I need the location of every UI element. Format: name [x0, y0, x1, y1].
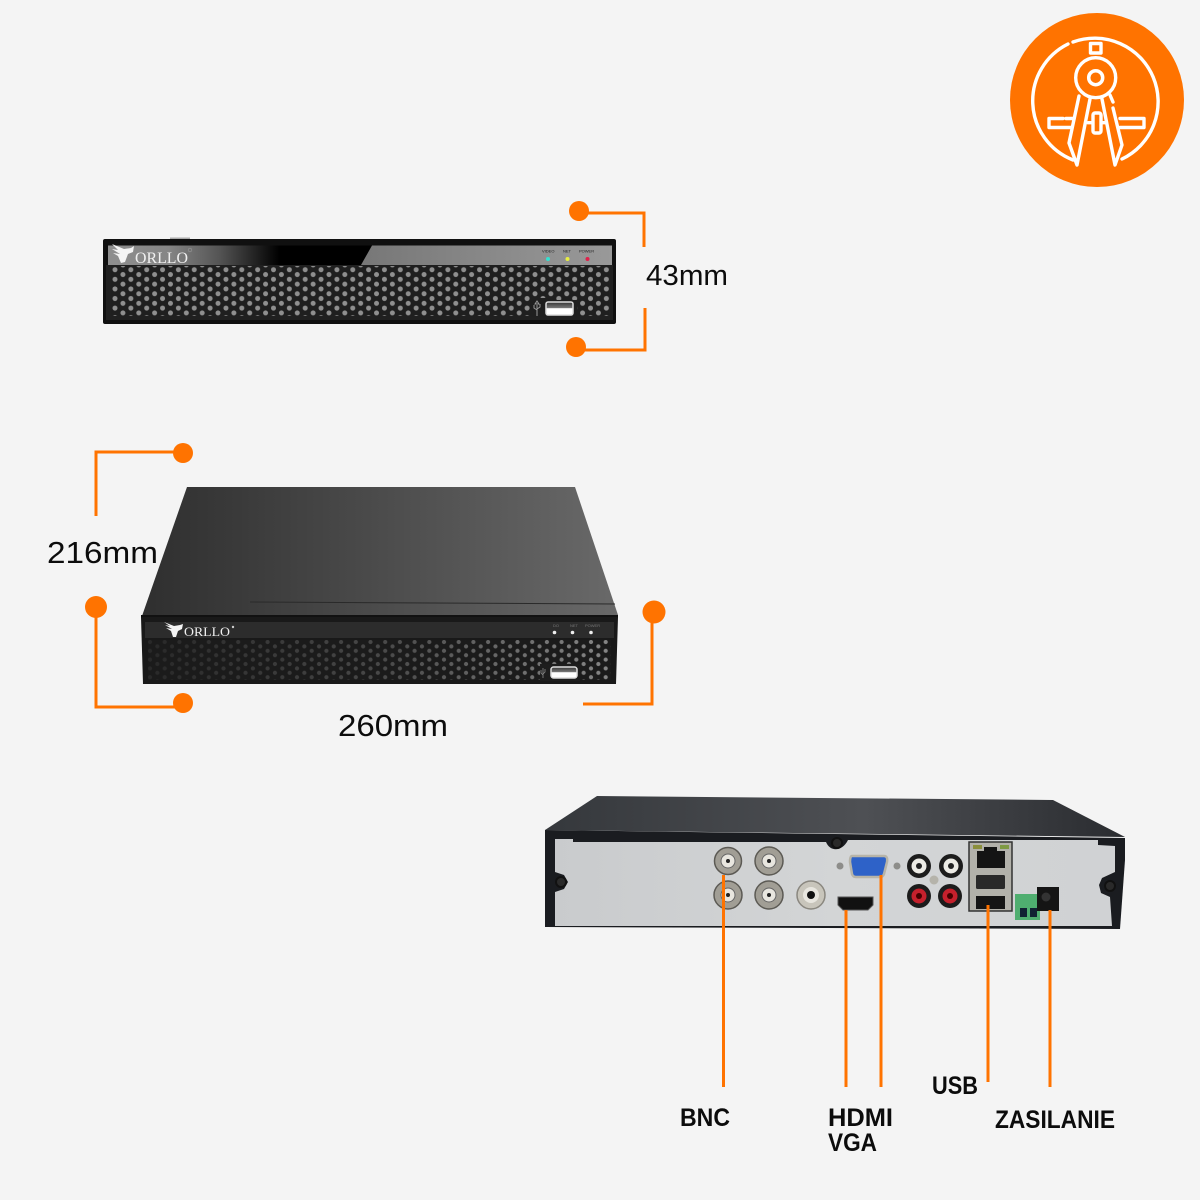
indicator labels	[542, 248, 594, 261]
connector: round jack	[797, 881, 825, 909]
dark strip slant	[280, 246, 372, 265]
usb port small	[540, 664, 580, 681]
connector: HDMI	[838, 897, 873, 910]
logo: ORLLO wordmark small	[164, 622, 234, 639]
connector: power socket	[1037, 887, 1059, 911]
dimension: 216mm bracket	[96, 443, 193, 516]
label: HDMI VGA	[828, 1104, 893, 1157]
label: HDMI VGA: HDMI	[828, 1104, 893, 1132]
text: 216mm: 216mm	[47, 535, 158, 570]
screws	[556, 838, 1115, 891]
indicator labels: POWER	[579, 248, 594, 254]
label: HDMI VGA: VGA	[828, 1129, 877, 1157]
connectors: BNC	[714, 847, 783, 909]
connector: ethernet and USB stack	[969, 842, 1012, 911]
device top surface	[142, 487, 618, 616]
rear frame	[545, 830, 1125, 929]
connector: VGA	[836, 856, 900, 877]
indicator labels: NET	[563, 248, 572, 254]
dimension: 43mm brackets	[566, 201, 645, 357]
front label strip	[108, 246, 612, 265]
connector: green terminal	[1015, 894, 1040, 920]
indicator lights: POWER	[585, 623, 600, 628]
indicator labels: VIDEO	[542, 248, 554, 254]
connectors: RCA audio	[907, 854, 963, 908]
perspective mesh grille	[148, 640, 611, 680]
device: front view with height dimension	[103, 238, 616, 324]
logo: ORLLO wordmark	[112, 244, 192, 267]
text: 260mm: 260mm	[338, 708, 448, 743]
usb port	[531, 298, 577, 317]
label: USB: USB	[932, 1072, 978, 1100]
perspective front strip	[145, 622, 614, 638]
indicator lights: DO	[553, 623, 559, 628]
logo: ORLLO wordmark small: ORLLO	[184, 624, 230, 639]
label: BNC: BNC	[680, 1104, 730, 1132]
logo: ORLLO wordmark: ORLLO	[135, 250, 188, 267]
device: rear view	[545, 796, 1125, 929]
indicator lights: NET	[570, 623, 579, 628]
front mesh grille	[111, 266, 609, 316]
icon: orange compass badge	[1010, 13, 1184, 187]
rear top surface	[545, 796, 1125, 837]
dimension: 260mm brackets	[85, 596, 666, 713]
indicator lights	[553, 623, 600, 634]
label: ZASILANIE: ZASILANIE	[995, 1106, 1115, 1134]
rear panel	[555, 839, 1115, 926]
callout lines	[724, 875, 1050, 1087]
device front face	[141, 617, 618, 684]
text: 43mm: 43mm	[646, 260, 728, 292]
device: perspective view	[141, 487, 618, 684]
